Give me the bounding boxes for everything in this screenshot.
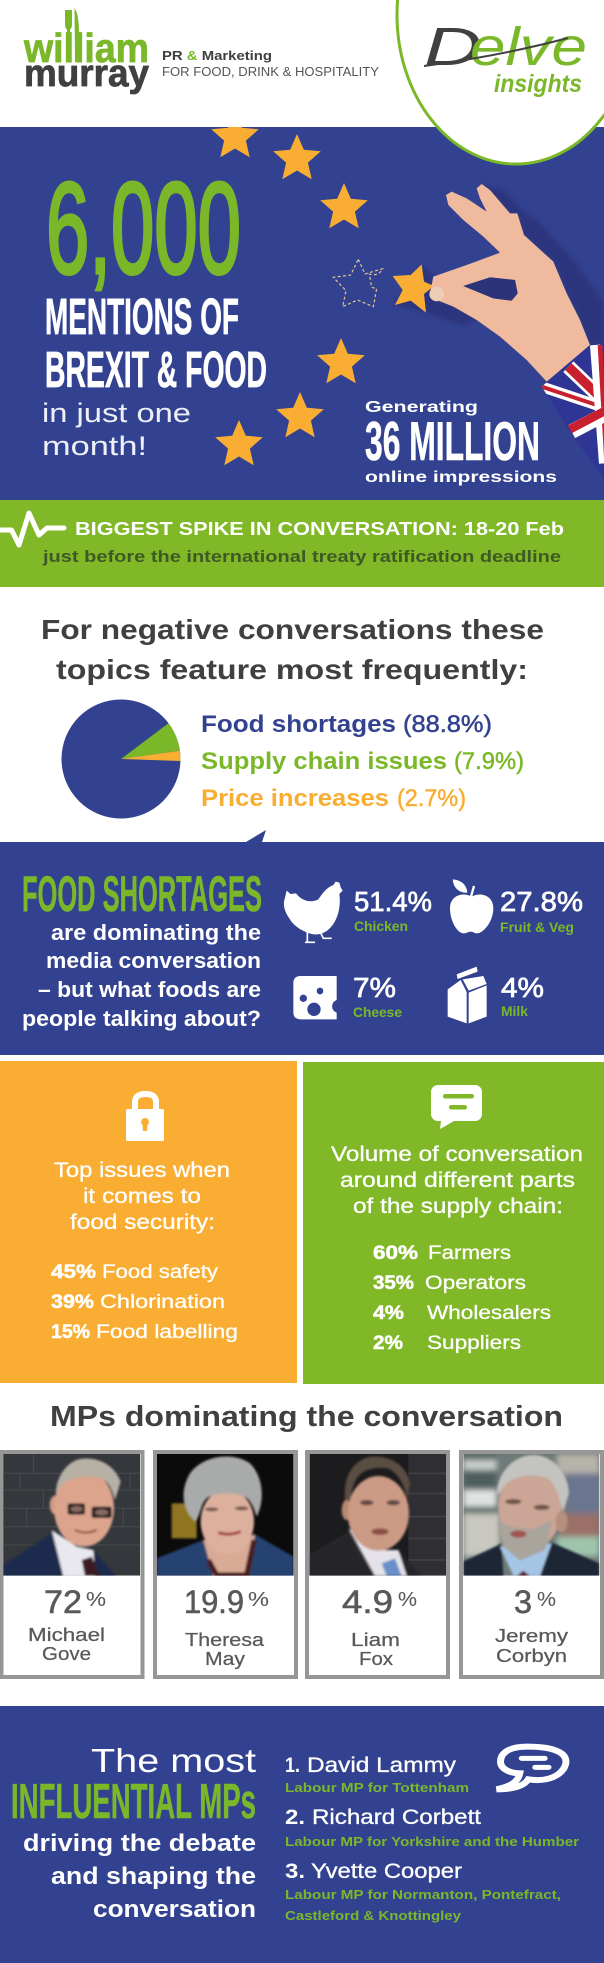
headline: mentions: MENTIONS OF [45, 288, 239, 345]
list: food security issues: Food labelling [96, 1322, 238, 1343]
list: food security issues: 15% [51, 1322, 90, 1343]
legend: topics: (2.7%) [397, 785, 466, 812]
text: Fox name [351, 1630, 400, 1669]
logo: William Murray: william [23, 25, 149, 71]
list: food security issues: Chlorination [100, 1292, 225, 1313]
list item: Richard Corbett: 2. [285, 1806, 305, 1829]
stat: cheese: 7% [353, 972, 396, 1003]
stat: milk: Milk [501, 1003, 528, 1019]
list item: Richard Corbett: Richard Corbett [312, 1806, 481, 1829]
heading: negative conversations: topics feature most frequently: [56, 654, 528, 685]
badge: Delve insights: insights [494, 70, 582, 98]
stat: milk [501, 972, 544, 1019]
list item: David Lammy [285, 1754, 469, 1795]
text: May name: May [205, 1649, 245, 1669]
text: Gove name [28, 1625, 105, 1664]
list item: Yvette Cooper [285, 1860, 561, 1923]
text: supply chain heading: Volume of conversation [331, 1143, 583, 1166]
text: May name [185, 1630, 265, 1669]
icon: chicken [284, 882, 343, 942]
legend: topics: Supply chain issues [201, 748, 447, 775]
logo: William Murray: murray [24, 53, 149, 95]
icon: chat bubble [431, 1085, 482, 1129]
list: supply chain volumes: 35% [373, 1273, 414, 1294]
list item: Yvette Cooper: Labour MP for Normanton, Pontefract, [285, 1887, 561, 1902]
stat: milk: 4% [501, 972, 544, 1003]
text: supply chain heading: of the supply chain: [353, 1195, 563, 1218]
banner: biggest spike [0, 500, 604, 587]
headline: 6,000: 6,000 [46, 155, 241, 301]
pie chart: topics [62, 700, 181, 818]
headline: brexit and food: BREXIT & FOOD [45, 341, 267, 398]
list item: David Lammy: David Lammy [307, 1754, 457, 1777]
panel: hero [0, 112, 604, 500]
text: food shortages description: are dominating the [51, 920, 261, 945]
text: supply chain heading [331, 1143, 583, 1218]
text: food shortages description: media conversation [46, 948, 261, 973]
text: logo strapline: FOR FOOD, DRINK & HOSPITALITY [162, 64, 379, 79]
panel: influential MPs [0, 1706, 604, 1963]
card: Liam Fox [307, 1452, 448, 1677]
photo: Theresa May [157, 1454, 294, 1577]
text: driving the debate [23, 1830, 256, 1923]
list item: David Lammy: 1. [285, 1754, 300, 1777]
icon: cheese [293, 976, 337, 1019]
list item: Yvette Cooper: Castleford & Knottingley [285, 1908, 462, 1923]
stat: chicken: 51.4% [354, 886, 432, 917]
list item: Richard Corbett: Labour MP for Yorkshire and the Humber [285, 1834, 579, 1849]
card: Michael Gove [2, 1452, 142, 1677]
text: in just one month [42, 398, 191, 461]
stat: Fox percentage: % [398, 1589, 417, 1611]
list item: Yvette Cooper: Yvette Cooper [311, 1860, 462, 1883]
list: supply chain volumes: Suppliers [427, 1333, 521, 1354]
stat: cheese: Cheese [353, 1004, 402, 1020]
stat: chicken [354, 886, 432, 934]
photo: Michael Gove [3, 1454, 140, 1577]
stat: Gove percentage: 72 [44, 1584, 82, 1620]
list: food security issues: 39% [51, 1292, 94, 1313]
stat: Fox percentage: 4.9 [342, 1584, 393, 1620]
stat: May percentage: % [248, 1589, 269, 1611]
logo: William Murray [23, 8, 149, 95]
icon: union flag cuff [540, 342, 604, 482]
list item: Richard Corbett [285, 1806, 579, 1849]
text: Fox name: Fox [359, 1649, 393, 1669]
stat: 36 million impressions: online impressions [365, 469, 557, 486]
icon: pulse line [0, 513, 64, 545]
text: spike date: BIGGEST SPIKE IN CONVERSATION: 18-20 Feb [75, 518, 564, 539]
list: supply chain volumes: Wholesalers [427, 1303, 551, 1324]
stat: fruit and veg [500, 886, 583, 935]
icon: apple [450, 879, 493, 933]
text: Fox name: Liam [351, 1630, 400, 1650]
text: Corbyn name [495, 1626, 568, 1666]
text: the most: The most [91, 1742, 256, 1779]
stat: Corbyn percentage [514, 1584, 556, 1620]
text: logo strapline [162, 48, 379, 79]
text: driving the debate: conversation [93, 1896, 256, 1923]
icon: milk carton [448, 967, 487, 1023]
text: May name: Theresa [185, 1630, 265, 1650]
list: supply chain volumes: 60% [373, 1243, 418, 1264]
stat: cheese [353, 972, 402, 1020]
header [0, 0, 604, 164]
list: supply chain volumes: Operators [425, 1273, 526, 1294]
text: driving the debate: and shaping the [51, 1863, 256, 1890]
stat: 36 million impressions: Generating [365, 399, 478, 416]
stat: May percentage: 19.9 [184, 1584, 244, 1620]
panel: food security [0, 1061, 297, 1383]
panel: food shortages [0, 830, 604, 1055]
icon: padlock [126, 1094, 164, 1141]
list item: Yvette Cooper: 3. [285, 1860, 305, 1883]
illustration: hand pulling star [333, 184, 604, 482]
text: Corbyn name: Corbyn [496, 1646, 567, 1666]
stat: Gove percentage [44, 1584, 106, 1620]
stat: fruit and veg: Fruit & Veg [500, 919, 574, 935]
list: supply chain volumes: 2% [373, 1333, 403, 1354]
heading: food shortages: FOOD SHORTAGES [22, 866, 262, 922]
text: logo strapline: PR & Marketing [162, 48, 272, 63]
stat: Fox percentage [342, 1584, 417, 1620]
list: food security issues: Food safety [102, 1262, 219, 1283]
text: food shortages description [22, 920, 261, 1031]
legend: topics: Food shortages [201, 711, 396, 738]
list: food security issues [51, 1262, 238, 1343]
legend: topics: Price increases [201, 785, 389, 812]
list: supply chain volumes: 4% [373, 1303, 404, 1324]
stat: 36 million impressions [365, 399, 557, 486]
text: in just one month: in just one [42, 398, 191, 428]
stars ring [211, 112, 368, 465]
text: driving the debate: driving the debate [23, 1830, 256, 1857]
stat: Corbyn percentage: % [537, 1589, 556, 1611]
card: Theresa May [155, 1452, 296, 1677]
text: supply chain heading: around different parts [340, 1169, 575, 1192]
heading: negative conversations: For negative conversations these [41, 614, 544, 645]
heading: negative conversations [41, 614, 544, 685]
badge: Delve insights [397, 0, 604, 164]
photo: Liam Fox [309, 1454, 446, 1577]
text: Gove name: Michael [28, 1625, 105, 1645]
stat: Corbyn percentage: 3 [514, 1584, 532, 1620]
text: Gove name: Gove [42, 1644, 91, 1664]
text: food security heading: Top issues when [54, 1159, 230, 1182]
badge: Delve insights: elve [470, 17, 587, 77]
photo: Jeremy Corbyn [463, 1454, 599, 1577]
stat: chicken: Chicken [354, 918, 408, 934]
legend: topics [201, 711, 524, 812]
badge: Delve insights: D [424, 17, 482, 77]
legend: topics: (7.9%) [454, 748, 524, 775]
text: food shortages description: people talking about? [22, 1006, 261, 1031]
text: Corbyn name: Jeremy [495, 1626, 568, 1646]
card: Jeremy Corbyn [461, 1452, 602, 1677]
heading: influential MPs: INFLUENTIAL MPs [11, 1775, 256, 1829]
list item: David Lammy: Labour MP for Tottenham [285, 1780, 469, 1795]
heading: MPs dominating: MPs dominating the conversation [50, 1401, 563, 1433]
stat: fruit and veg: 27.8% [500, 886, 583, 917]
text: food shortages description: – but what foods are [38, 977, 261, 1002]
list: food security issues: 45% [51, 1262, 96, 1283]
text: food security heading: food security: [70, 1211, 215, 1234]
list: supply chain volumes [373, 1243, 551, 1354]
icon: speech bubble outline [497, 1747, 566, 1789]
list: supply chain volumes: Farmers [428, 1243, 511, 1264]
text: deadline note: just before the international treaty ratification deadline [42, 548, 561, 566]
panel: supply chain [303, 1062, 604, 1384]
stat: Gove percentage: % [86, 1589, 106, 1611]
text: food security heading [54, 1159, 230, 1234]
legend: topics: (88.8%) [403, 711, 492, 738]
text: food security heading: it comes to [83, 1185, 201, 1208]
text: in just one month: month! [42, 431, 147, 461]
